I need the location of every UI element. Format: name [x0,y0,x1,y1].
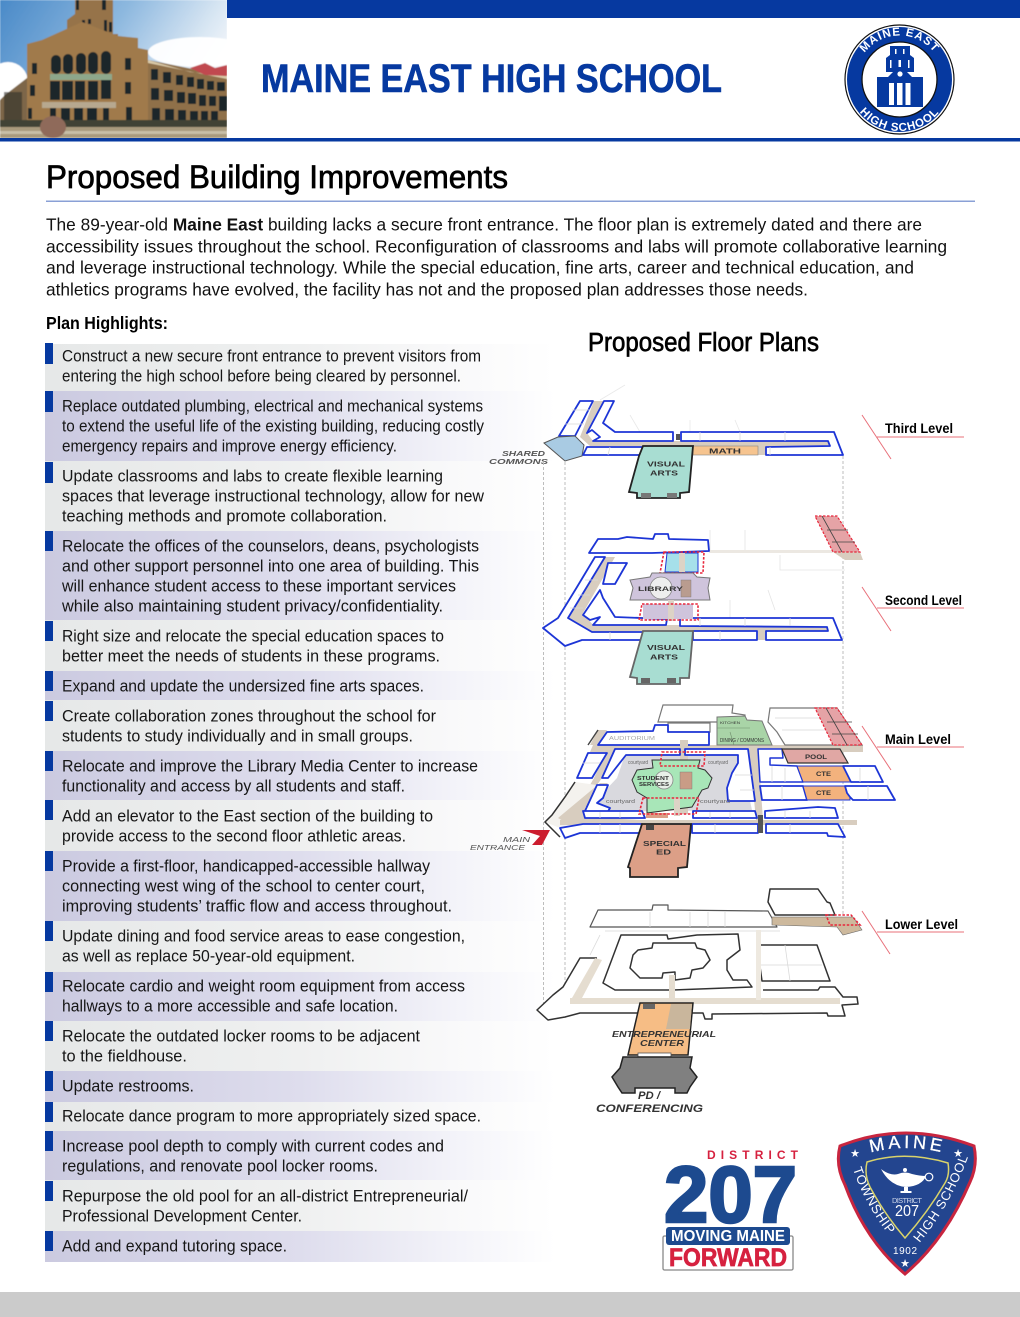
item 4: will enhance student access to these important services [61,576,456,595]
floor plan guide lines [544,456,843,1018]
floor plan: main level: KITCHEN [720,720,740,725]
item 18: Add and expand tutoring space. [62,1236,287,1255]
item 6 [45,671,555,700]
item 8: Relocate and improve the Library Media Center to increase [62,756,478,775]
floor plan: main level: SERVICES [639,782,670,788]
item 2: to extend the useful life of the existing building, reducing costly [62,416,485,435]
floor plan: second level: VISUAL [647,643,686,652]
floor plan: lower level: CENTER [640,1038,685,1048]
floor plan: third level: SHARED [502,451,545,458]
level label: Second Level: Second Level [885,592,962,608]
logo: Maine Township High School shield: MAINE [869,1136,942,1152]
item 5 [45,620,555,671]
floor plan: main level [470,705,895,877]
floor plan: third level [489,385,843,498]
item 7 [45,700,555,751]
item 12 [45,972,555,1021]
item 8: functionality and access by all students and staff. [62,776,405,795]
item 5: better meet the needs of students in these programs. [62,646,440,665]
heading: Plan Highlights: Plan Highlights: [46,313,168,333]
item 6: Expand and update the undersized fine arts spaces. [62,676,424,695]
floor plan: lower level: ENTREPRENEURIAL [612,1029,716,1039]
item 4 [45,531,555,620]
item 3: spaces that leverage instructional technology, allow for new [62,486,485,505]
heading: Proposed Building Improvements: Proposed Building Improvements [46,159,508,195]
floor plan: main level: courtyard [606,799,635,805]
floor plan: lower level: CONFERENCING [596,1103,704,1115]
logo: District 207 Moving Maine Forward: FORWARD [669,1244,787,1272]
item 3: teaching methods and promote collaboration. [62,506,387,525]
item 14: Update restrooms. [62,1076,194,1095]
intro paragraph: The 89-year-old Maine East building lacks a secure front entrance. The floor plan is extremely dated and there are [46,214,922,234]
intro paragraph: accessibility issues throughout the school. Reconfiguration of classrooms and labs will promote collaborative learning [46,236,947,256]
item 16: regulations, and renovate pool locker rooms. [62,1156,378,1175]
floor plan: main level: courtyard [700,799,730,805]
floor plan: main level: courtyard [708,760,728,766]
item 12: hallways to a more accessible and safe location. [62,996,398,1015]
item 3: Update classrooms and labs to create flexible learning [62,466,443,485]
floor plan: main level: STUDENT [637,776,669,782]
intro paragraph: and leverage instructional technology. While the special education, fine arts, career and technical education, and [46,257,914,277]
floor plan: lower level: PD / [638,1090,662,1102]
item 17: Repurpose the old pool for an all-district Entrepreneurial/ [62,1186,468,1205]
item 10 [45,851,555,921]
title: MAINE EAST HIGH SCHOOL [261,57,722,101]
level label: Lower Level: Lower Level [885,916,958,932]
item 10: connecting west wing of the school to center court, [62,876,425,895]
floor plan: main level: ENTRANCE [470,845,525,852]
floor plan: main level: POOL [805,754,827,761]
floor plan: main level: CTE [816,771,832,778]
item 7: Create collaboration zones throughout the school for [62,706,436,725]
item 7: students to study individually and in small groups. [62,726,413,745]
floor plan: lower level [537,889,862,1115]
item 2: Replace outdated plumbing, electrical and mechanical systems [62,396,483,415]
logo: Maine Township High School shield: HIGH SCHOOL [913,1157,968,1242]
logo: Maine Township High School shield: 1902 [893,1246,917,1257]
item 13: Relocate the outdated locker rooms to be adjacent [62,1026,420,1045]
item 11: as well as replace 50-year-old equipment. [62,946,355,965]
logo: Maine Township High School shield: ★ [850,1148,860,1160]
item 13 [45,1021,555,1071]
item 5: Right size and relocate the special education spaces to [62,626,444,645]
item 14 [45,1071,555,1102]
floor plan: main level: courtyard [628,760,648,766]
highlight list [45,343,555,1262]
item 12: Relocate cardio and weight room equipment from access [62,976,465,995]
item 1 [45,343,555,391]
item 9: Add an elevator to the East section of the building to [62,806,433,825]
item 16: Increase pool depth to comply with current codes and [62,1136,444,1155]
item 2 [45,391,555,461]
heading: Proposed Floor Plans: Proposed Floor Plans [588,329,819,357]
floor plan: second level: ARTS [650,652,678,662]
floor plan: main level: MAIN [503,837,531,844]
floor plan: third level: ARTS [650,468,678,478]
item 9: provide access to the second floor athletic areas. [62,826,406,845]
floor plan: main level: CTE [816,790,832,797]
level label: Second Level [862,587,964,631]
item 4: while also maintaining student privacy/confidentiality. [61,596,443,615]
logo: Maine Township High School shield: ★ [953,1148,963,1160]
logo: Maine East High School seal: HIGH SCHOOL [860,107,938,131]
logo: Maine Township High School shield: TOWNSHIP [854,1166,894,1231]
header rule [0,138,1020,142]
item 1: Construct a new secure front entrance to prevent visitors from [62,346,481,365]
level label: Main Level [862,726,964,770]
floor plan: main level: DINING / COMMONS [720,738,765,744]
item 18 [45,1231,555,1262]
level label: Main Level: Main Level [885,731,951,747]
logo: Maine Township High School shield: DISTRICT [892,1196,922,1205]
logo: Maine Township High School shield [836,1132,977,1276]
floor plan: main level: ED [656,848,672,856]
logo: Maine East High School seal: MAINE EAST [859,28,940,52]
top blue bar [227,0,1020,18]
logo: Maine Township High School shield: ★ [900,1258,910,1270]
item 8 [45,751,555,800]
level label: Lower Level [862,911,964,954]
logo: District 207 Moving Maine Forward: 207 [664,1150,797,1239]
floor plan: third level: MATH [709,448,741,456]
floor plan: second level: LIBRARY [638,587,683,593]
item 17 [45,1180,555,1231]
item 1: entering the high school before being cleared by personnel. [62,366,461,385]
logo: District 207 Moving Maine Forward: DISTRICT [707,1148,799,1162]
item 10: Provide a first-floor, handicapped-accessible hallway [62,856,431,875]
floor plan: second level [543,516,863,684]
footer band [0,1292,1020,1317]
floor plan: third level: VISUAL [647,460,686,468]
intro paragraph [46,214,947,299]
item 15: Relocate dance program to more appropriately sized space. [62,1106,481,1125]
logo: Maine East High School seal [844,24,955,135]
item 13: to the fieldhouse. [62,1046,187,1065]
item 3 [45,461,555,531]
item 11: Update dining and food service areas to ease congestion, [62,926,465,945]
level label: Third Level: Third Level [885,420,953,436]
item 11 [45,921,555,972]
intro paragraph: athletics programs have evolved, the facility has not and the proposed plan addresses those needs. [46,279,808,299]
item 10: improving students’ traffic flow and access throughout. [62,896,452,915]
photo: Maine East building [0,0,252,138]
item 9 [45,800,555,851]
item 15 [45,1102,555,1131]
logo: District 207 Moving Maine Forward: MOVING MAINE [671,1228,785,1245]
item 16 [45,1131,555,1180]
floor plan: main level: SPECIAL [643,839,687,848]
item 4: Relocate the offices of the counselors, deans, psychologists [62,536,479,555]
logo: Maine Township High School shield: 207 [895,1203,919,1220]
item 2: emergency repairs and improve energy efficiency. [62,436,397,455]
item 17: Professional Development Center. [62,1206,302,1225]
item 4: and other support personnel into one area of building. This [62,556,479,575]
level label: Third Level [862,415,964,459]
floor plan: third level: COMMONS [489,459,549,466]
floor plan: main level: AUDITORIUM [609,736,655,742]
